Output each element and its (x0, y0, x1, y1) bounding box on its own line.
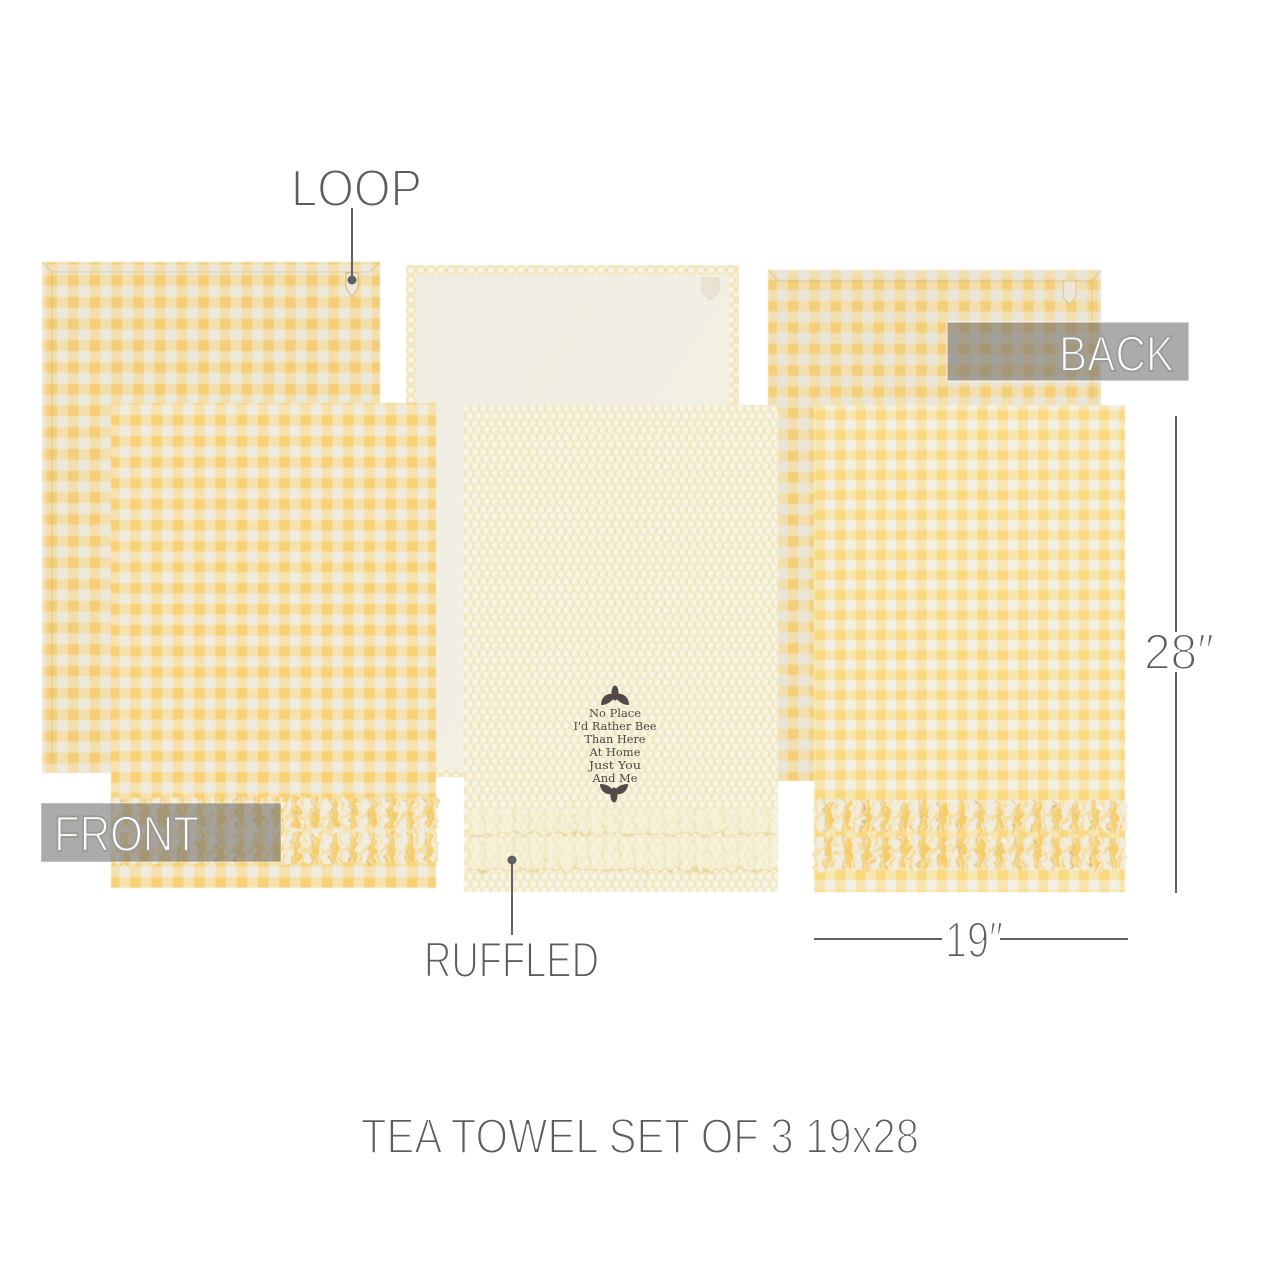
callout: loop: LOOP (291, 160, 422, 218)
panel: front honeycomb towel, centre (464, 405, 778, 892)
panel: back gingham towel, right (768, 270, 1101, 781)
label: back (947, 322, 1189, 382)
embroidered verse: Just You (588, 758, 641, 772)
callout: ruffled: RUFFLED (424, 932, 599, 988)
hem stitching, right towel (768, 270, 1101, 400)
embroidered verse: At Home (589, 745, 641, 759)
panel: front gingham towel, left (111, 403, 438, 888)
embroidered verse: No Place (589, 706, 641, 720)
dimension: height 28 inches: 28″ (1144, 624, 1214, 680)
ruffle row upper, centre towel (466, 808, 776, 834)
embroidered verse (574, 706, 657, 785)
dimension: width 19 inches: 19″ (945, 912, 1003, 968)
ruffle row lower, left towel (111, 832, 438, 863)
callout: loop (291, 160, 422, 284)
icon: bee bottom (600, 784, 628, 802)
embroidered verse: I'd Rather Bee (574, 719, 657, 733)
plain cream reverse of centre towel (415, 275, 729, 770)
ruffle row upper, left towel (112, 798, 437, 828)
embroidered verse: Than Here (584, 732, 646, 746)
panel: back honeycomb towel, centre (406, 265, 739, 777)
embroidered verse: And Me (592, 771, 638, 785)
callout: ruffled (424, 856, 599, 988)
icon: hanging loop, left towel (346, 273, 358, 297)
label: front (41, 803, 281, 862)
hem stitching, left towel (42, 262, 380, 765)
title: TEA TOWEL SET OF 3 19x28 (361, 1110, 919, 1164)
label: front: FRONT (54, 806, 199, 862)
ruffle row lower, centre towel (466, 838, 776, 870)
label: back: BACK (1059, 326, 1174, 382)
icon: hanging loop, centre towel (702, 278, 719, 300)
icon: bee top (601, 686, 629, 705)
icon: hanging loop, right towel (1063, 281, 1076, 304)
panel: back gingham towel, left (42, 262, 380, 773)
ruffle row lower, right towel (814, 837, 1126, 869)
panel: front gingham towel, right (814, 405, 1127, 892)
ruffle row upper, right towel (815, 801, 1127, 831)
